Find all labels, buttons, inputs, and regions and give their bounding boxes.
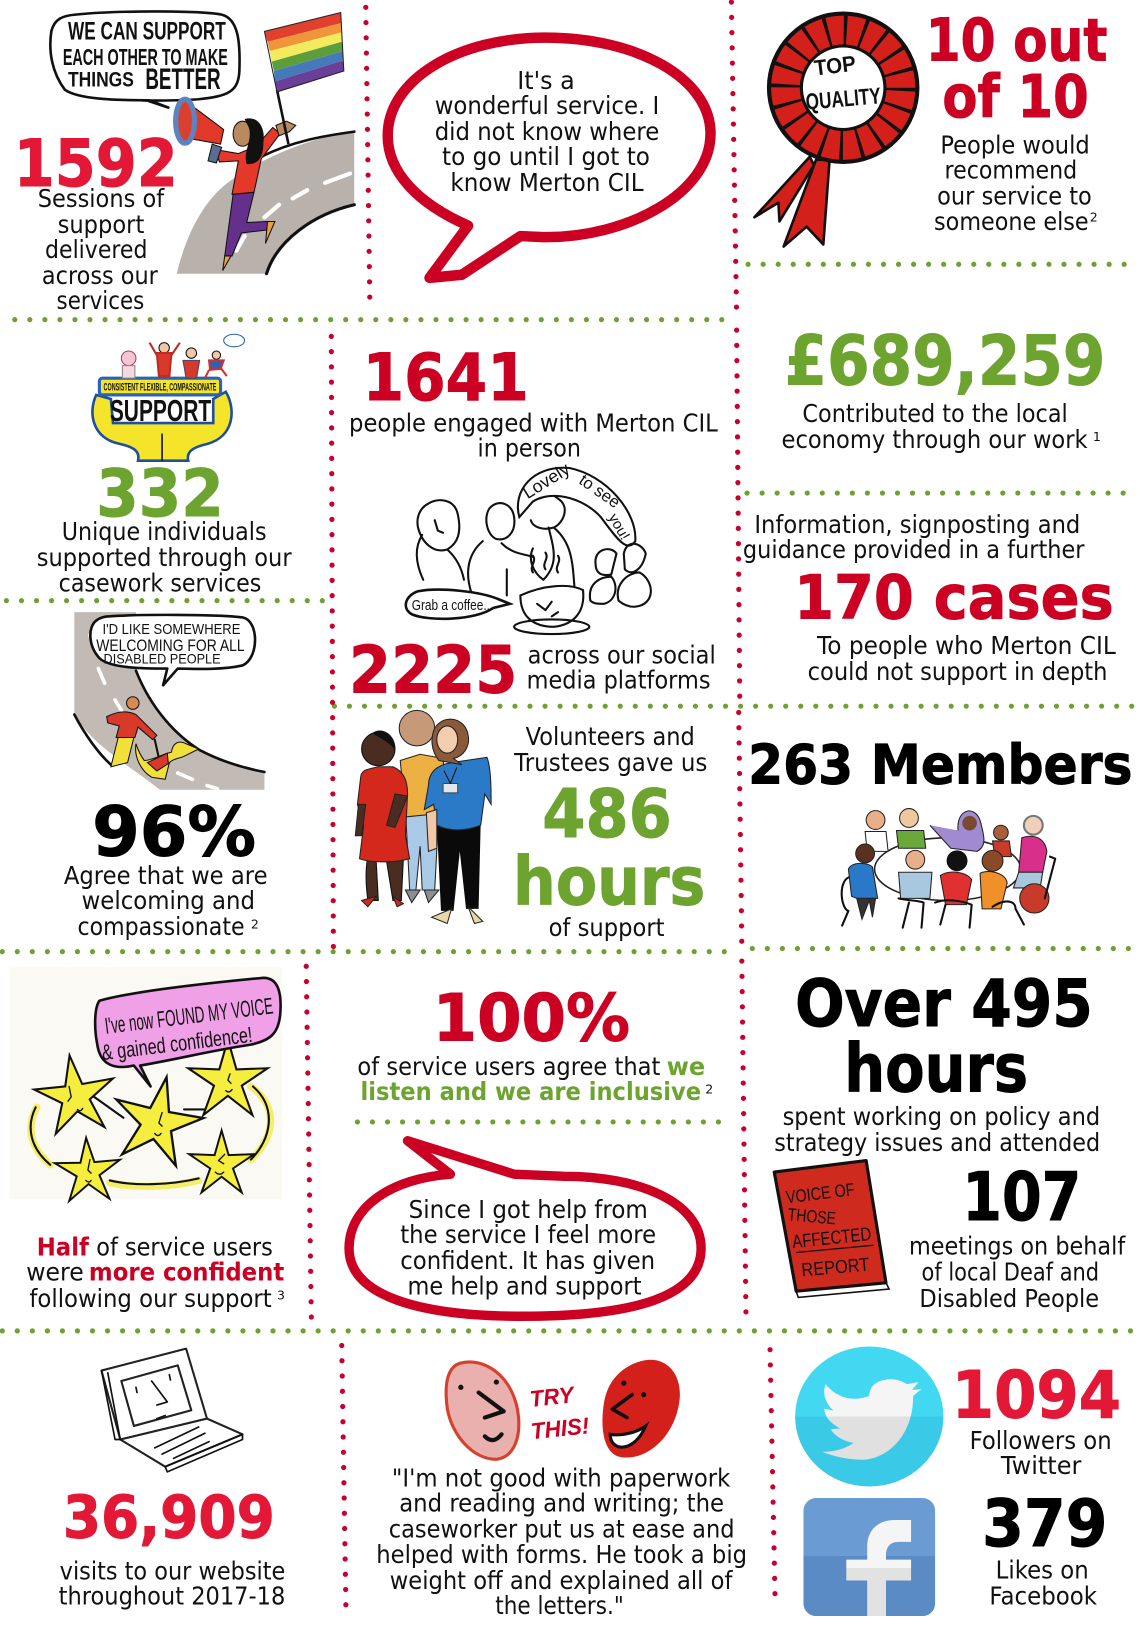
text: volunteers and trustees: Trustees gave us bbox=[513, 748, 707, 777]
text: unique individuals bbox=[37, 517, 292, 597]
panel: £689,259 bbox=[782, 321, 1105, 454]
icon: rosette: QUALITY bbox=[805, 82, 882, 115]
illustration: try this faces bbox=[446, 1360, 680, 1459]
quote text: Since I got help from bbox=[409, 1195, 648, 1224]
quote text: know Merton CIL bbox=[450, 168, 644, 197]
quote text: "I'm not good with paperwork bbox=[392, 1464, 731, 1493]
text: to people bbox=[808, 631, 1116, 686]
illustration: stars and voice bubble bbox=[10, 967, 282, 1202]
illustration: people talking over coffee: you! bbox=[605, 511, 632, 543]
stat: 96%: 96% bbox=[92, 793, 256, 873]
stat: 100%: 100% bbox=[433, 981, 630, 1056]
illustration: try this faces: THIS! bbox=[530, 1412, 591, 1444]
panel: half more confident bbox=[10, 967, 285, 1313]
stat: 1094: 1094 bbox=[952, 1359, 1121, 1434]
text: half of service users: Half bbox=[37, 1233, 90, 1262]
text: likes on facebook: Facebook bbox=[989, 1582, 1097, 1611]
text: half of service users: of service users bbox=[96, 1233, 273, 1262]
stat: 2225: 2225 bbox=[349, 634, 517, 709]
quote text: me help and support bbox=[408, 1271, 642, 1300]
text: volunteers and trustees: Volunteers and bbox=[526, 722, 695, 751]
quote text bbox=[400, 1195, 656, 1300]
text: contributed bbox=[782, 399, 1101, 454]
quote text: weight off and explained all of bbox=[390, 1566, 733, 1595]
stat: over 495 hours bbox=[795, 967, 1093, 1108]
icon: report book: VOICE OF bbox=[785, 1179, 856, 1207]
text: contributed: economy through our work bbox=[782, 425, 1088, 454]
icon: rosette: TOP bbox=[813, 51, 857, 81]
text: agree welcoming: 2 bbox=[251, 917, 259, 932]
speech bubble outline bbox=[349, 1141, 701, 1316]
stat: 170 cases: 170 cases bbox=[794, 563, 1114, 633]
text: people would recommend: our service to bbox=[937, 182, 1092, 211]
text: half of service users: 3 bbox=[277, 1288, 285, 1303]
text: people would recommend: 2 bbox=[1090, 209, 1098, 224]
quote text: the letters." bbox=[495, 1591, 624, 1620]
text: volunteers and trustees bbox=[513, 722, 707, 777]
text: people engaged: in person bbox=[478, 434, 581, 463]
text: spent working: spent working on policy and bbox=[783, 1102, 1100, 1131]
text: contributed: Contributed to the local bbox=[802, 399, 1068, 428]
illustration: support sign held by hands: SUPPORT bbox=[110, 395, 212, 428]
text: people would recommend: People would bbox=[940, 131, 1090, 160]
text: half of service users: were bbox=[26, 1258, 84, 1287]
text: people would recommend bbox=[934, 131, 1098, 236]
illustration: people around a table bbox=[842, 809, 1055, 928]
text: information signposting: guidance provided in a further bbox=[743, 535, 1085, 564]
text: people engaged: people engaged with Merton CIL bbox=[349, 408, 718, 437]
illustration: road with man and guide dog bbox=[74, 612, 264, 790]
icon: twitter bbox=[795, 1347, 943, 1487]
speech bubble: we can support: EACH OTHER TO MAKE bbox=[63, 44, 228, 70]
icon: laptop bbox=[101, 1349, 243, 1472]
text: people engaged bbox=[349, 408, 718, 463]
stat: over 495 hours: Over 495 bbox=[795, 967, 1093, 1042]
stat: 107: 107 bbox=[962, 1158, 1081, 1236]
text: sessions of support: services bbox=[57, 286, 144, 315]
text: spent working: strategy issues and attended bbox=[774, 1128, 1100, 1157]
illustration: road with man and guide dog: WELCOMING FOR ALL bbox=[96, 636, 245, 655]
text: agree welcoming: Agree that we are bbox=[64, 861, 268, 890]
text: people would recommend: someone else bbox=[934, 207, 1089, 236]
text: unique individuals: Unique individuals bbox=[62, 517, 267, 546]
text: sessions of support: support bbox=[58, 210, 144, 239]
text: service users agree: of service users agree that bbox=[357, 1052, 661, 1081]
quote text: helped with forms. He took a big bbox=[376, 1540, 747, 1569]
text: followers on twitter: Followers on bbox=[970, 1426, 1112, 1455]
panel: 10 out of 10 bbox=[754, 7, 1107, 247]
speech bubble: we can support bbox=[50, 11, 240, 108]
text: agree welcoming: compassionate bbox=[77, 912, 245, 941]
panel: 263 members bbox=[748, 733, 1133, 928]
illustration: people talking over coffee bbox=[406, 459, 651, 634]
icon: facebook bbox=[803, 1498, 935, 1616]
text: contributed: 1 bbox=[1093, 429, 1101, 444]
text: social media bbox=[527, 640, 716, 694]
panel: quote wonderful service bbox=[388, 38, 711, 278]
quote text: and reading and writing; the bbox=[399, 1489, 724, 1518]
panel: 100% inclusive bbox=[357, 981, 713, 1106]
panel: 332 individuals bbox=[37, 334, 292, 597]
speech bubble: we can support: THINGS bbox=[68, 69, 134, 92]
stat: 1641: 1641 bbox=[363, 341, 529, 416]
illustration: stars and voice bubble: & gained confidence! bbox=[100, 1022, 254, 1065]
illustration: stars and voice bubble: I've now FOUND MY VOICE bbox=[103, 992, 274, 1039]
text: meetings: of local Deaf and bbox=[922, 1258, 1099, 1287]
illustration: support sign held by hands: CONSISTENT FLEXIBLE, COMPASSIONATE bbox=[104, 382, 217, 394]
quote text: It's a bbox=[517, 66, 575, 95]
text: visits: visits to our website bbox=[60, 1557, 285, 1586]
text: service users agree: we bbox=[667, 1052, 705, 1081]
text: social media: across our social bbox=[528, 640, 716, 669]
panel: quote confident bbox=[349, 1141, 701, 1316]
text: information signposting bbox=[743, 510, 1085, 564]
panel: volunteers 486 hours bbox=[355, 710, 707, 942]
illustration: support sign held by hands bbox=[92, 334, 245, 461]
icon: megaphone bbox=[176, 99, 224, 163]
icon: report book: REPORT bbox=[801, 1254, 870, 1280]
quote text: to go until I got to bbox=[442, 142, 650, 171]
quote text bbox=[435, 66, 659, 197]
text: half of service users bbox=[26, 1233, 285, 1313]
text: half of service users: following our support bbox=[29, 1284, 272, 1313]
illustration: road with man and guide dog: DISABLED PEOPLE bbox=[104, 651, 221, 666]
text: unique individuals: supported through our bbox=[37, 543, 292, 572]
stat: 486 hours: hours bbox=[513, 843, 705, 921]
stat: over 495 hours: hours bbox=[844, 1030, 1028, 1108]
stat: 10 out of 10: of 10 bbox=[942, 63, 1089, 131]
stat: 10 out of 10: 10 out bbox=[926, 7, 1107, 75]
icon: report book: AFFECTED bbox=[791, 1223, 872, 1252]
text: service users agree: 2 bbox=[705, 1082, 713, 1097]
speech bubble: we can support: BETTER bbox=[145, 64, 221, 96]
stat: 332: 332 bbox=[96, 457, 224, 532]
quote text: confident. It has given bbox=[400, 1246, 655, 1275]
stat: 486 hours bbox=[513, 775, 705, 921]
stat: 379: 379 bbox=[982, 1487, 1107, 1562]
text: followers on twitter: Twitter bbox=[1000, 1451, 1082, 1480]
icon: report book: THOSE bbox=[787, 1204, 837, 1228]
illustration: people talking over coffee: Grab a coffee... bbox=[412, 598, 493, 614]
stat: 10 out of 10 bbox=[926, 7, 1107, 131]
text: service users agree: listen and we are inclusive bbox=[361, 1077, 701, 1106]
illustration: try this faces: TRY bbox=[528, 1381, 577, 1412]
text: information signposting: Information, signposting and bbox=[754, 510, 1080, 539]
text: sessions of support: across our bbox=[42, 261, 159, 290]
panel: 96% welcoming bbox=[64, 612, 268, 941]
panel: 170 cases bbox=[743, 510, 1116, 686]
illustration: road and campaigner bbox=[177, 13, 354, 274]
quote text: caseworker put us at ease and bbox=[389, 1515, 735, 1544]
text: agree welcoming: welcoming and bbox=[82, 886, 255, 915]
text: meetings: Disabled People bbox=[919, 1284, 1099, 1313]
text: unique individuals: casework services bbox=[59, 568, 261, 597]
text: social media: media platforms bbox=[527, 665, 711, 694]
text: spent working bbox=[774, 1102, 1100, 1157]
text: sessions of support: delivered bbox=[45, 235, 147, 264]
text: people would recommend: recommend bbox=[945, 156, 1077, 185]
panel: over 495 hours bbox=[774, 967, 1126, 1313]
text: of support: of support bbox=[549, 913, 665, 942]
text: likes on facebook bbox=[989, 1555, 1097, 1611]
text: visits bbox=[59, 1556, 285, 1611]
panel: 1592 sessions bbox=[14, 11, 354, 315]
icon: report book bbox=[774, 1161, 889, 1297]
text: sessions of support: Sessions of bbox=[38, 184, 165, 213]
illustration: people talking over coffee: to see bbox=[576, 470, 624, 512]
panel: try this quote bbox=[376, 1360, 747, 1620]
panel: 1641 people engaged bbox=[349, 341, 718, 709]
speech bubble outline bbox=[388, 38, 711, 278]
panel: website visits bbox=[59, 1349, 285, 1611]
panel: social media followers bbox=[795, 1347, 1121, 1616]
text: half of service users: more confident bbox=[89, 1258, 284, 1287]
quote text: wonderful service. I bbox=[435, 91, 659, 120]
quote text: did not know where bbox=[435, 117, 659, 146]
text: sessions of support bbox=[38, 184, 165, 315]
text: service users agree bbox=[357, 1052, 713, 1106]
quote text bbox=[376, 1464, 747, 1620]
text: to people: To people who Merton CIL bbox=[816, 631, 1116, 660]
speech bubble: we can support: WE CAN SUPPORT bbox=[68, 18, 226, 46]
quote text: the service I feel more bbox=[400, 1220, 656, 1249]
stat: 1592: 1592 bbox=[14, 127, 178, 202]
text: visits: throughout 2017-18 bbox=[59, 1582, 285, 1611]
text: agree welcoming bbox=[64, 861, 268, 941]
text: meetings bbox=[909, 1232, 1126, 1313]
illustration: people talking over coffee: Lovely bbox=[519, 459, 573, 503]
illustration: road with man and guide dog: I'D LIKE SOMEWHERE bbox=[103, 622, 241, 638]
text: followers on twitter bbox=[970, 1426, 1112, 1480]
illustration: three volunteers bbox=[355, 710, 491, 923]
stat: £689,259: £689,259 bbox=[785, 321, 1105, 401]
stat: 486 hours: 486 bbox=[542, 775, 672, 853]
text: likes on facebook: Likes on bbox=[996, 1555, 1089, 1584]
text: to people: could not support in depth bbox=[808, 657, 1107, 686]
stat: 36,909: 36,909 bbox=[63, 1484, 275, 1552]
icon: rosette bbox=[754, 14, 917, 247]
